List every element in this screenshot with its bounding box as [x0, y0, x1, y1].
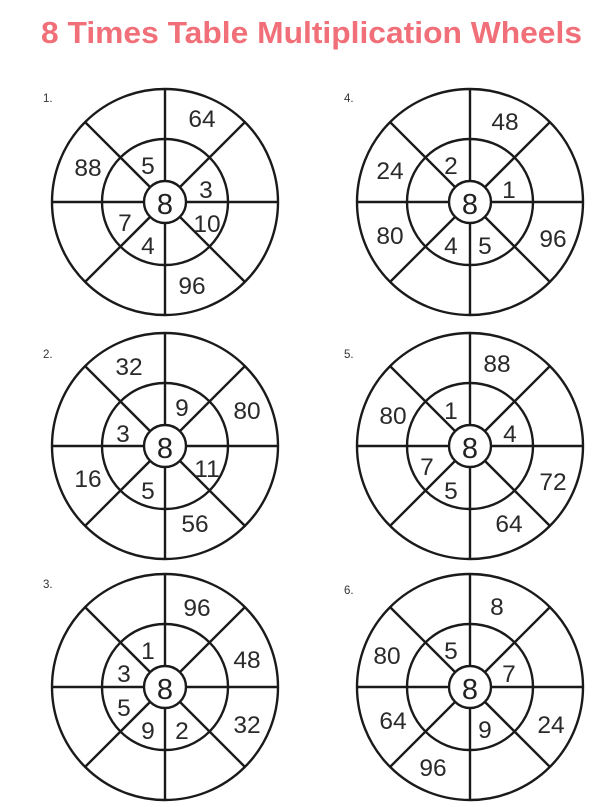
wheel 4: 5 [478, 233, 492, 260]
wheel 1: 1. [43, 93, 53, 105]
wheel 5: 1 [444, 398, 458, 425]
wheel 2: 9 [175, 395, 189, 422]
wheel 3: 96 [183, 595, 211, 622]
wheel 2: 11 [194, 456, 220, 483]
wheel 5: 80 [379, 403, 407, 430]
wheel 3: 3. [43, 579, 53, 591]
wheel 6: 6. [344, 585, 354, 597]
wheel 5: 7 [420, 454, 434, 481]
wheel 4: 48 [491, 109, 519, 136]
wheel 3 [43, 574, 278, 800]
wheel 2: 8 [157, 433, 173, 465]
wheel 2: 80 [233, 398, 261, 425]
wheel 4: 8 [462, 189, 478, 221]
wheel 2: 32 [115, 354, 143, 381]
wheel 3: 9 [141, 718, 155, 745]
wheel 6 [344, 574, 583, 800]
wheel 4 [344, 89, 583, 315]
wheel 4: 80 [376, 223, 404, 250]
wheel 5: 5 [444, 478, 458, 505]
wheel 3: 1 [141, 638, 155, 665]
wheel 1: 10 [193, 211, 221, 238]
wheel 4: 1 [502, 177, 516, 204]
wheel 3: 48 [233, 647, 261, 674]
wheel 4: 4. [344, 93, 354, 105]
wheel 1: 7 [118, 210, 132, 237]
wheel 3: 2 [175, 718, 189, 745]
wheel 6: 9 [478, 717, 492, 744]
wheel 3: 8 [157, 674, 173, 706]
wheel 1: 8 [157, 189, 173, 221]
wheel 6: 8 [490, 594, 504, 621]
wheel 2: 2. [43, 349, 53, 361]
wheel 1: 3 [199, 177, 213, 204]
wheel 3: 5 [117, 695, 131, 722]
wheel 1: 5 [141, 153, 155, 180]
wheel 4: 24 [376, 158, 404, 185]
wheel 3: 32 [233, 712, 261, 739]
wheel 5: 64 [495, 511, 523, 538]
wheel 3: 3 [117, 661, 131, 688]
wheel 6: 64 [379, 708, 407, 735]
wheel 5: 5. [344, 349, 354, 361]
wheel 6: 7 [502, 661, 516, 688]
wheel 2: 5 [141, 478, 155, 505]
wheel 6: 5 [444, 638, 458, 665]
wheel 2: 56 [181, 511, 209, 538]
wheel 1: 4 [141, 233, 155, 260]
wheel 2: 16 [74, 466, 102, 493]
wheel 1: 88 [74, 155, 102, 182]
wheel 4: 96 [539, 226, 567, 253]
wheel 5 [344, 333, 583, 559]
wheel 2 [43, 333, 278, 559]
wheel 6: 80 [373, 643, 401, 670]
wheel 5: 88 [483, 351, 511, 378]
wheel 6: 8 [462, 674, 478, 706]
wheel 4: 4 [444, 233, 458, 260]
wheel 5: 8 [462, 433, 478, 465]
wheel 5: 72 [539, 469, 567, 496]
wheel 5: 4 [503, 421, 517, 448]
wheel 1: 64 [188, 106, 216, 133]
wheel 1 [43, 89, 278, 315]
title: 8 Times Table Multiplication Wheels [41, 15, 582, 50]
wheel 1: 96 [178, 273, 206, 300]
wheel 2: 3 [116, 421, 130, 448]
wheel 6: 24 [537, 712, 565, 739]
wheel 6: 96 [419, 755, 447, 782]
wheel 4: 2 [444, 153, 458, 180]
